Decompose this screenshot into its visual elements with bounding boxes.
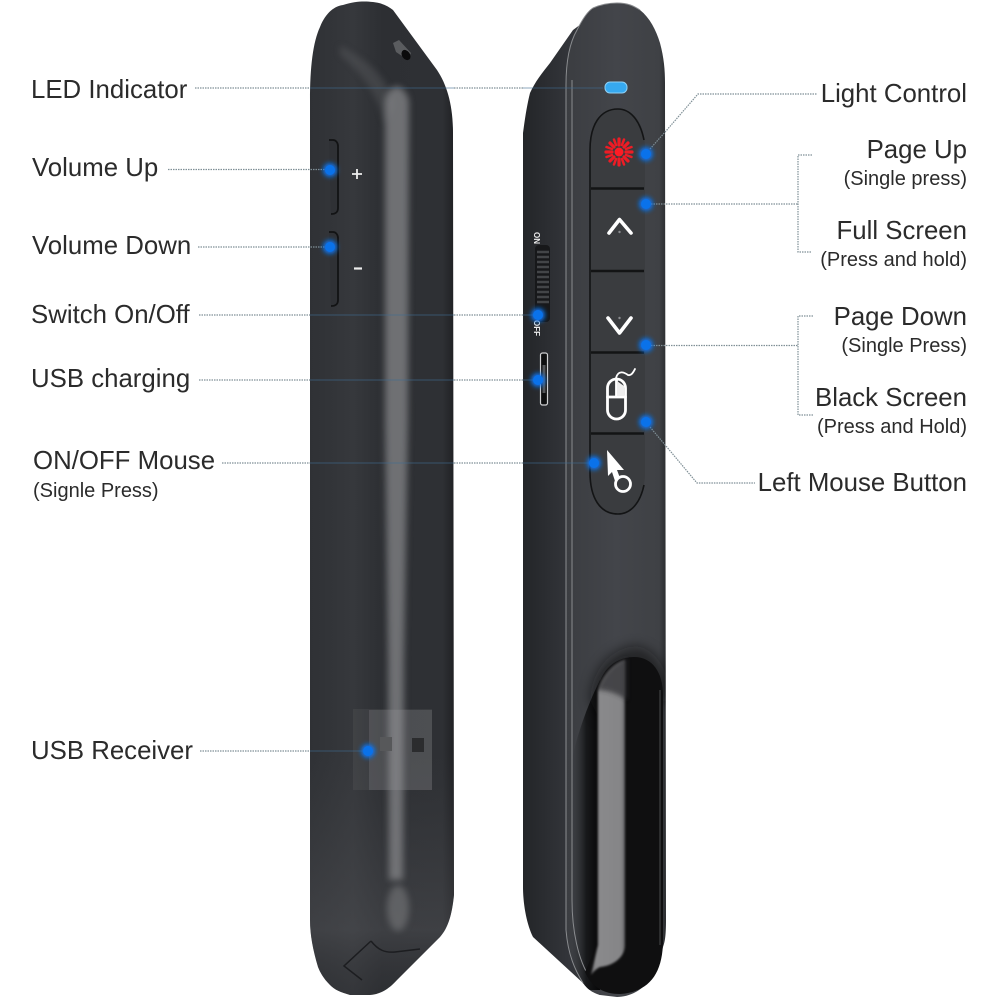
usb receiver overlay	[353, 709, 432, 790]
faint top arc	[341, 49, 388, 116]
callout: Page Up and Full Screen: (Single press)	[844, 168, 967, 190]
plus symbol	[352, 169, 362, 179]
pocket side shadow	[572, 646, 668, 990]
callout: Page Up and Full Screen: Full Screen	[837, 217, 967, 245]
callout: Light Control	[639, 80, 967, 161]
switch label on: ON	[532, 232, 541, 244]
led indicator	[605, 82, 627, 93]
callout: LED Indicator: LED Indicator	[31, 76, 188, 104]
callout: Page Down and Black Screen: Black Screen	[815, 384, 967, 412]
callout: ON/OFF Mouse: (Signle Press)	[33, 480, 159, 502]
pen pocket	[585, 657, 663, 994]
highlight bottom blob	[387, 885, 409, 931]
lanyard hole	[393, 40, 412, 62]
pocket gloss highlight	[591, 660, 625, 975]
usb charging port	[540, 353, 548, 405]
icon: pointer	[607, 450, 630, 492]
device: right front view	[523, 3, 668, 997]
pocket recess	[585, 657, 663, 994]
callout: Page Down and Black Screen: Page Down	[834, 303, 967, 331]
callout: Switch On/Off: Switch On/Off	[31, 301, 190, 329]
button strip outline	[590, 109, 644, 514]
callout: ON/OFF Mouse	[33, 447, 601, 502]
button strip	[590, 109, 645, 514]
right device front	[566, 3, 666, 997]
callout: USB Receiver	[31, 737, 375, 765]
volume up button	[329, 140, 338, 214]
front edge highlight	[566, 3, 640, 983]
lower body sheen	[310, 0, 454, 1000]
volume down button	[329, 232, 338, 306]
icon: up chevron	[609, 220, 631, 233]
callout: USB charging	[31, 365, 545, 393]
callout: Volume Down: Volume Down	[32, 232, 191, 260]
callout: Volume Down	[32, 232, 337, 260]
callout: USB Receiver: USB Receiver	[31, 737, 193, 765]
highlight band	[385, 86, 409, 880]
icon: laser	[606, 139, 632, 165]
switch label off: OFF	[532, 320, 541, 336]
left device body	[310, 1, 454, 995]
callout: Page Up and Full Screen	[639, 136, 967, 271]
right device side	[523, 10, 600, 995]
minus symbol	[354, 267, 362, 270]
icon: mouse	[608, 369, 635, 419]
callout: Left Mouse Button	[639, 415, 967, 497]
side switch	[535, 245, 550, 322]
callout: ON/OFF Mouse: ON/OFF Mouse	[33, 447, 215, 475]
callout: Page Down and Black Screen: (Press and Hold)	[817, 416, 967, 438]
callout: Volume Up: Volume Up	[32, 154, 158, 182]
callout: Left Mouse Button: Left Mouse Button	[758, 469, 967, 497]
callout: Switch On/Off	[31, 301, 545, 329]
callout: Volume Up	[32, 154, 337, 182]
pocket right edge	[659, 690, 661, 945]
icon: down chevron	[608, 317, 631, 333]
pocket gloss fade	[597, 658, 627, 700]
callout: USB charging: USB charging	[31, 365, 190, 393]
button dividers	[591, 188, 644, 434]
callout: Page Up and Full Screen: (Press and hold)	[820, 249, 967, 271]
callout: Page Down and Black Screen	[639, 303, 967, 438]
device: left side view	[310, 0, 454, 1000]
callout: Light Control: Light Control	[821, 80, 967, 108]
callout: Page Down and Black Screen: (Single Press)	[841, 335, 967, 357]
callout: Page Up and Full Screen: Page Up	[867, 136, 967, 164]
bottom clip	[344, 941, 420, 980]
